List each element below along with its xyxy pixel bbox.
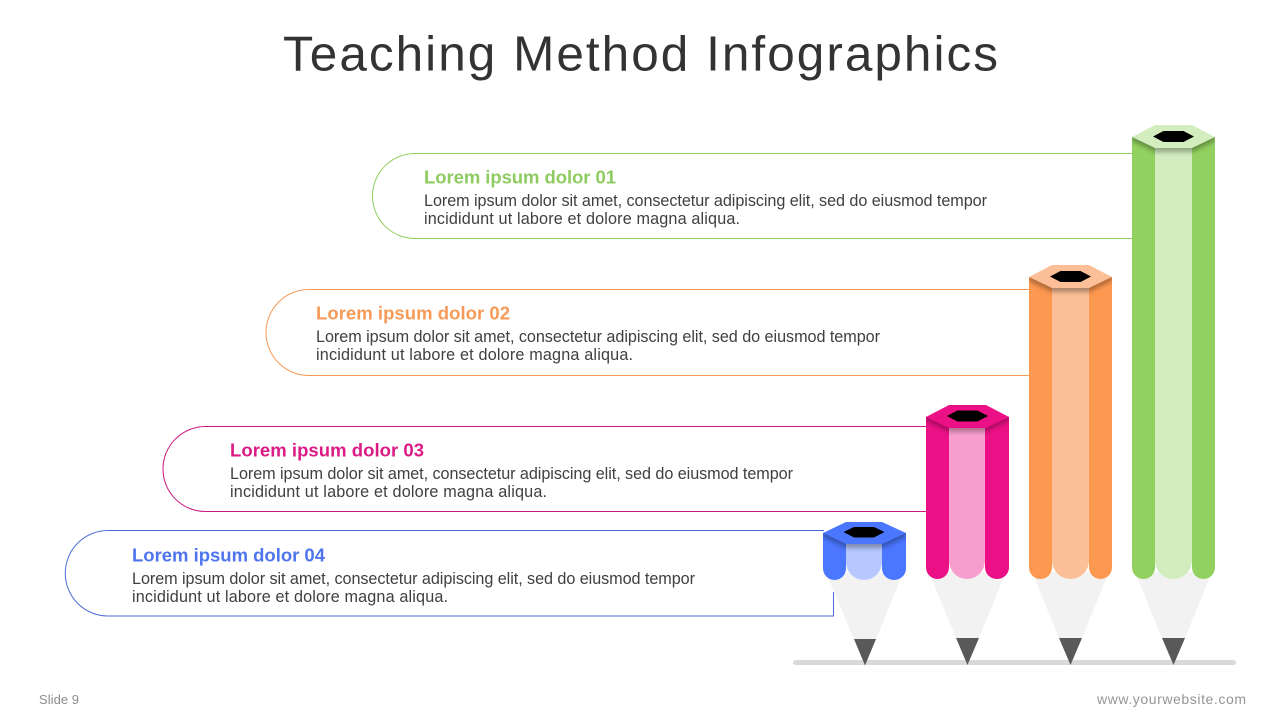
pencil: orange (1029, 265, 1112, 665)
callout 04 body text (132, 570, 696, 606)
pencil: blue (823, 522, 906, 666)
callout 03 body text (230, 465, 794, 501)
callout 03 outline (163, 426, 927, 512)
callout 03 body text: incididunt ut labore et dolore magna aliqua. (230, 483, 547, 501)
callout 02 body text: incididunt ut labore et dolore magna aliqua. (316, 346, 633, 364)
callout 01 body text: incididunt ut labore et dolore magna aliqua. (424, 210, 740, 228)
callout 02 body text: Lorem ipsum dolor sit amet, consectetur adipiscing elit, sed do eiusmod tempor (316, 328, 881, 346)
callout 04 body text: incididunt ut labore et dolore magna aliqua. (132, 588, 448, 606)
callout 02 heading: Lorem ipsum dolor 02 (316, 302, 510, 324)
callout 03 body text: Lorem ipsum dolor sit amet, consectetur adipiscing elit, sed do eiusmod tempor (230, 465, 794, 483)
panel: callout 03 (163, 426, 927, 512)
pencil: green (1132, 125, 1215, 665)
callout 01 body text (424, 192, 988, 228)
pencil: pink (926, 405, 1009, 665)
callout 04 outline (65, 530, 833, 616)
footer: website: www.yourwebsite.com (1096, 691, 1246, 707)
panel: callout 04 (65, 530, 833, 616)
callout 01 outline (372, 154, 1133, 238)
footer: slide number: Slide 9 (39, 692, 79, 707)
title: Teaching Method Infographics (283, 26, 998, 82)
callout 04 heading: Lorem ipsum dolor 04 (132, 544, 326, 566)
panel: callout 02 (266, 290, 1030, 376)
callout 01 body text: Lorem ipsum dolor sit amet, consectetur adipiscing elit, sed do eiusmod tempor (424, 192, 988, 210)
panel: callout 01 (372, 154, 1133, 238)
callout 02 body text (316, 328, 881, 364)
callout 03 heading: Lorem ipsum dolor 03 (230, 440, 424, 460)
callout 04 body text: Lorem ipsum dolor sit amet, consectetur adipiscing elit, sed do eiusmod tempor (132, 570, 696, 588)
callout 02 outline (266, 290, 1030, 376)
callout 01 heading: Lorem ipsum dolor 01 (424, 166, 616, 188)
ground line (793, 660, 1236, 665)
